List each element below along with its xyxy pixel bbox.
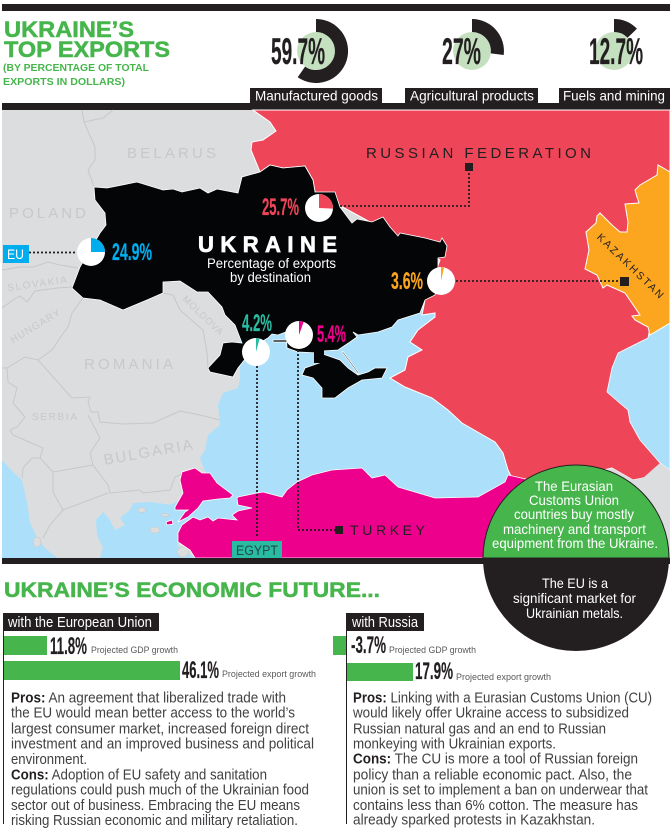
- text: Russia pros and cons: already sparked protests in Kazakhstan.: [353, 813, 595, 829]
- text: EU pros and cons: Cons: Adoption of EU safety and sanitation: [11, 767, 267, 783]
- title: Ukraine's top exports: (BY PERCENTAGE OF TOTAL: [3, 62, 150, 74]
- country labels: ROMANIA: [84, 356, 173, 373]
- label: Kazakhstan: KAZAKHSTAN: [594, 231, 666, 301]
- panel: with Russia: [333, 613, 652, 829]
- title: Ukraine's top exports: UKRAINE’S: [4, 17, 134, 42]
- title: Ukraine's top exports: TOP EXPORTS: [4, 37, 170, 62]
- text: Russia pros and cons: union is set to implement a ban on underwear that: [353, 783, 648, 799]
- pie: Turkey 5.4%: [285, 321, 346, 349]
- donut: manufactured goods 59.7%: 59.7%: [271, 31, 325, 72]
- Caspian Sea: [607, 323, 670, 470]
- text: EU pros and cons: sector out of business. Embracing the EU means: [11, 798, 300, 814]
- country borders: [2, 110, 220, 538]
- donut: manufactured goods 59.7%: [250, 19, 382, 104]
- callout: Russian Federation leader: [340, 163, 473, 206]
- donut: agricultural products 27%: [405, 19, 538, 104]
- country labels: HUNGARY: [9, 307, 63, 346]
- text: Russia pros and cons: would likely offer Ukraine access to subsidized: [352, 705, 629, 721]
- country labels: SLOVAKIA: [7, 275, 68, 294]
- circle callout: Eurasian Customs Union and EU: The Eurasian: [535, 478, 613, 494]
- text: Russia pros and cons: contains less than 6% cotton. The measure has: [353, 798, 638, 814]
- label: Ukraine heading: UKRAINE: [198, 232, 337, 257]
- bar: Russia projected export growth: Projected export growth: [456, 672, 551, 682]
- callout: Kazakhstan leader: [456, 277, 629, 286]
- bar: Russia projected GDP growth: -3.7%: [351, 632, 386, 659]
- pie: EU 24.9%: 24.9%: [112, 239, 152, 266]
- bar: Russia projected GDP growth: Projected GDP growth: [389, 645, 476, 655]
- donut: fuels and mining 12.7%: [559, 19, 670, 104]
- bar: Russia projected export growth: [347, 658, 551, 685]
- bar: EU projected GDP growth: 11.8%: [50, 633, 87, 660]
- label: Ukraine heading: [198, 232, 337, 285]
- country labels: MOLDOVA: [180, 294, 225, 338]
- text: EU pros and cons: risking Russian economic and military retaliation.: [11, 813, 298, 829]
- pie: Turkey 5.4%: 5.4%: [317, 321, 346, 348]
- circle callout: Eurasian Customs Union and EU: significant market for: [513, 590, 636, 606]
- text: Russia pros and cons: Cons: The CU is more a tool of Russian foreign: [353, 751, 638, 767]
- Russia: [251, 110, 670, 481]
- circle callout: Eurasian Customs Union and EU: machinery and transport: [503, 521, 646, 537]
- south-east land: [600, 463, 670, 558]
- islands: [33, 508, 189, 557]
- bar: EU projected GDP growth: [4, 633, 178, 660]
- text: Russia pros and cons: monkeying with Ukrainian exports.: [353, 737, 556, 753]
- label: Ukraine heading: Percentage of exports: [207, 256, 336, 271]
- circle callout: Eurasian Customs Union and EU: Ukrainian metals.: [526, 605, 623, 621]
- Turkey: [166, 468, 530, 558]
- title: Ukraine's top exports: [3, 17, 170, 88]
- panel: with the European Union: [3, 613, 316, 829]
- bar: EU projected export growth: 46.1%: [182, 657, 219, 684]
- text: EU pros and cons: largest consumer market, increased foreign direct: [11, 721, 309, 737]
- text: EU pros and cons: Pros: An agreement that liberalized trade with: [11, 691, 286, 707]
- bar: Russia projected GDP growth: [333, 632, 476, 659]
- country labels: [7, 145, 225, 469]
- text: EU pros and cons: the EU would mean better access to the world’s: [11, 706, 295, 722]
- pie: EU 24.9%: [77, 238, 152, 266]
- pie: Russia 25.7%: 25.7%: [262, 194, 299, 221]
- donut: agricultural products 27%: 27%: [442, 31, 481, 72]
- heading: Ukraine's economic future: UKRAINE’S ECONOMIC FUTURE...: [4, 579, 380, 602]
- text: EU pros and cons: regulations could push much of the Ukrainian food: [11, 783, 309, 799]
- Kazakhstan: [585, 165, 670, 335]
- callout: EU leader: EU: [7, 247, 24, 262]
- text: Russia pros and cons: [352, 691, 652, 829]
- donut: fuels and mining 12.7%: Fuels and mining: [563, 88, 665, 104]
- donut: manufactured goods 59.7%: Manufactured goods: [255, 88, 378, 104]
- text: Russia pros and cons: policy than a reliable economic pact. Also, the: [353, 767, 632, 783]
- bar: EU projected GDP growth: Projected GDP growth: [91, 645, 178, 655]
- panel: with the European Union: with the European Union: [7, 615, 152, 631]
- callout: Egypt leader: [232, 366, 282, 558]
- circle callout: Eurasian Customs Union and EU: Customs Union: [529, 492, 619, 508]
- circle callout: Eurasian Customs Union and EU: countries buy mostly: [514, 506, 634, 522]
- text: Russia pros and cons: Pros: Linking with a Eurasian Customs Union (CU): [353, 691, 652, 707]
- pie: Kazakhstan 3.6%: 3.6%: [391, 268, 423, 295]
- label: Russian Federation: RUSSIAN FEDERATION: [366, 145, 591, 162]
- circle callout: Eurasian Customs Union and EU: equipment from the Ukraine.: [492, 535, 658, 551]
- bar: EU projected export growth: [4, 657, 316, 684]
- pie: Egypt 4.2%: 4.2%: [242, 310, 272, 337]
- panel: with Russia: with Russia: [351, 615, 419, 631]
- pie: Egypt 4.2%: [242, 310, 272, 366]
- label: Ukraine heading: by destination: [230, 270, 311, 285]
- donut: agricultural products 27%: Agricultural products: [410, 88, 534, 104]
- text: EU pros and cons: environment.: [11, 752, 87, 768]
- bar: Russia projected export growth: 17.9%: [415, 658, 453, 685]
- text: EU pros and cons: [11, 691, 314, 829]
- Ukraine: [72, 165, 447, 398]
- map panel: [2, 110, 670, 558]
- country labels: BELARUS: [127, 145, 216, 162]
- country labels: POLAND: [9, 205, 86, 222]
- callout: Egypt leader: EGYPT: [236, 543, 278, 558]
- bar: EU projected export growth: Projected export growth: [222, 669, 316, 679]
- callout: Turkey leader: [298, 350, 426, 538]
- callout: Turkey leader: TURKEY: [350, 522, 426, 538]
- country labels: SERBIA: [32, 412, 77, 423]
- text: Russia pros and cons: Russian natural gas and an end to Russian: [353, 721, 606, 737]
- circle callout: Eurasian Customs Union and EU: [483, 465, 669, 651]
- circle callout: Eurasian Customs Union and EU: The EU is a: [542, 575, 608, 591]
- title: Ukraine's top exports: EXPORTS IN DOLLARS): [3, 76, 125, 88]
- callout: EU leader: [3, 245, 77, 263]
- seas: [2, 300, 520, 558]
- text: EU pros and cons: investment and an improved business and political: [11, 737, 314, 753]
- country labels: BULGARIA: [102, 436, 194, 469]
